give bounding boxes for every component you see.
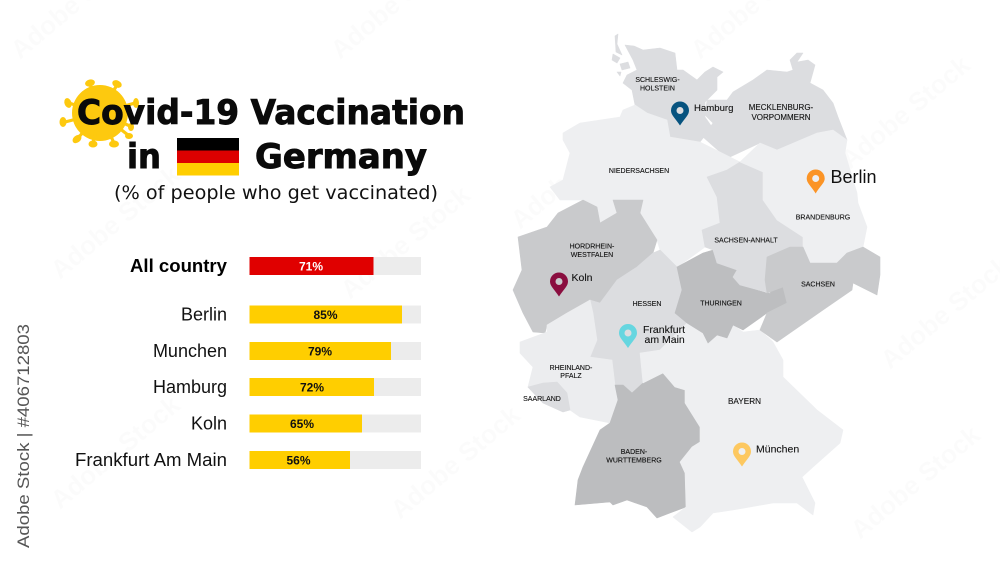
bar: Munchen: Munchen xyxy=(153,341,227,361)
bar: Koln: Koln xyxy=(191,414,227,434)
map labels: BRANDENBURG xyxy=(796,214,850,222)
map labels: NIEDERSACHSEN xyxy=(609,168,669,175)
region: Niedersachsen xyxy=(550,105,740,267)
region: Sachsen-Anhalt xyxy=(702,162,803,293)
map labels: BAYERN xyxy=(728,397,761,406)
bar: Frankfurt Am Main: 56% xyxy=(286,454,311,468)
pin: Frankfurt am Main: Frankfurt xyxy=(643,324,685,336)
map labels: SCHLESWIG- xyxy=(635,77,680,84)
bar: Hamburg: Hamburg xyxy=(153,377,227,397)
bar: All country xyxy=(130,256,421,276)
icon: virus xyxy=(60,78,139,148)
pin: Frankfurt am Main: am Main xyxy=(644,334,685,346)
pin: München: München xyxy=(756,444,799,456)
region: Baden-Wurttemberg xyxy=(575,373,700,518)
region: Saarland xyxy=(528,382,570,412)
bar: Berlin: 85% xyxy=(313,308,338,322)
map labels: WURTTEMBERG xyxy=(606,458,662,464)
title: in xyxy=(127,137,161,177)
title: Covid-19 Vaccination xyxy=(77,93,465,133)
map labels: BADEN- xyxy=(621,449,648,456)
pin: Koln xyxy=(550,272,593,296)
title: Germany xyxy=(255,137,427,177)
map labels: WESTFALEN xyxy=(571,252,613,259)
subtitle: (% of people who get vaccinated) xyxy=(114,182,438,204)
bar: All country: All country xyxy=(130,256,227,276)
region: Hessen xyxy=(590,250,687,393)
map labels xyxy=(523,77,850,464)
title xyxy=(77,93,465,177)
pin: Koln: Koln xyxy=(572,272,593,284)
bar: Koln xyxy=(191,414,421,434)
icon: German flag xyxy=(177,138,239,176)
pin: Frankfurt am Main xyxy=(619,324,685,348)
bar: Hamburg xyxy=(153,377,421,397)
region: Rheinland-Pfalz xyxy=(520,300,618,423)
bar: Munchen xyxy=(153,341,421,361)
map labels: SACHSEN xyxy=(801,282,835,288)
map labels: HORDRHEIN- xyxy=(570,244,615,250)
bar: Frankfurt Am Main xyxy=(75,450,421,470)
map labels: PFALZ xyxy=(560,373,582,380)
bar: Munchen: 79% xyxy=(308,344,332,358)
bar: Hamburg: 72% xyxy=(300,380,324,394)
map labels: MECKLENBURG- xyxy=(749,103,814,112)
pin: München xyxy=(733,442,799,466)
pin: Hamburg: Hamburg xyxy=(694,103,733,114)
region: Brandenburg xyxy=(740,130,867,263)
bar: Berlin xyxy=(181,304,421,324)
stock credit: Adobe Stock | #406712803 xyxy=(14,324,33,548)
region: Nordrhein-Westfalen xyxy=(513,200,657,333)
map labels: THURINGEN xyxy=(700,300,742,308)
pin: Berlin xyxy=(807,167,877,194)
bar: Berlin: Berlin xyxy=(181,304,227,324)
map labels: HOLSTEIN xyxy=(640,86,675,92)
region: Sachsen xyxy=(760,247,880,342)
map labels: SAARLAND xyxy=(523,396,561,403)
pin: Hamburg xyxy=(671,102,733,126)
region: Mecklenburg-Vorpommern xyxy=(703,53,847,157)
bar: All country: 71% xyxy=(299,260,323,274)
region: Bayern xyxy=(640,323,843,532)
map labels: HESSEN xyxy=(633,301,661,308)
map labels: RHEINLAND- xyxy=(550,365,593,372)
bar: Frankfurt Am Main: Frankfurt Am Main xyxy=(75,450,227,470)
pin: Berlin: Berlin xyxy=(830,167,877,187)
map of Germany xyxy=(513,34,880,532)
region: Schleswig-Holstein xyxy=(612,34,723,142)
region: Thuringen xyxy=(675,250,787,343)
bar: Koln: 65% xyxy=(290,417,314,431)
map labels: SACHSEN-ANHALT xyxy=(714,238,778,244)
map labels: VORPOMMERN xyxy=(751,113,811,122)
